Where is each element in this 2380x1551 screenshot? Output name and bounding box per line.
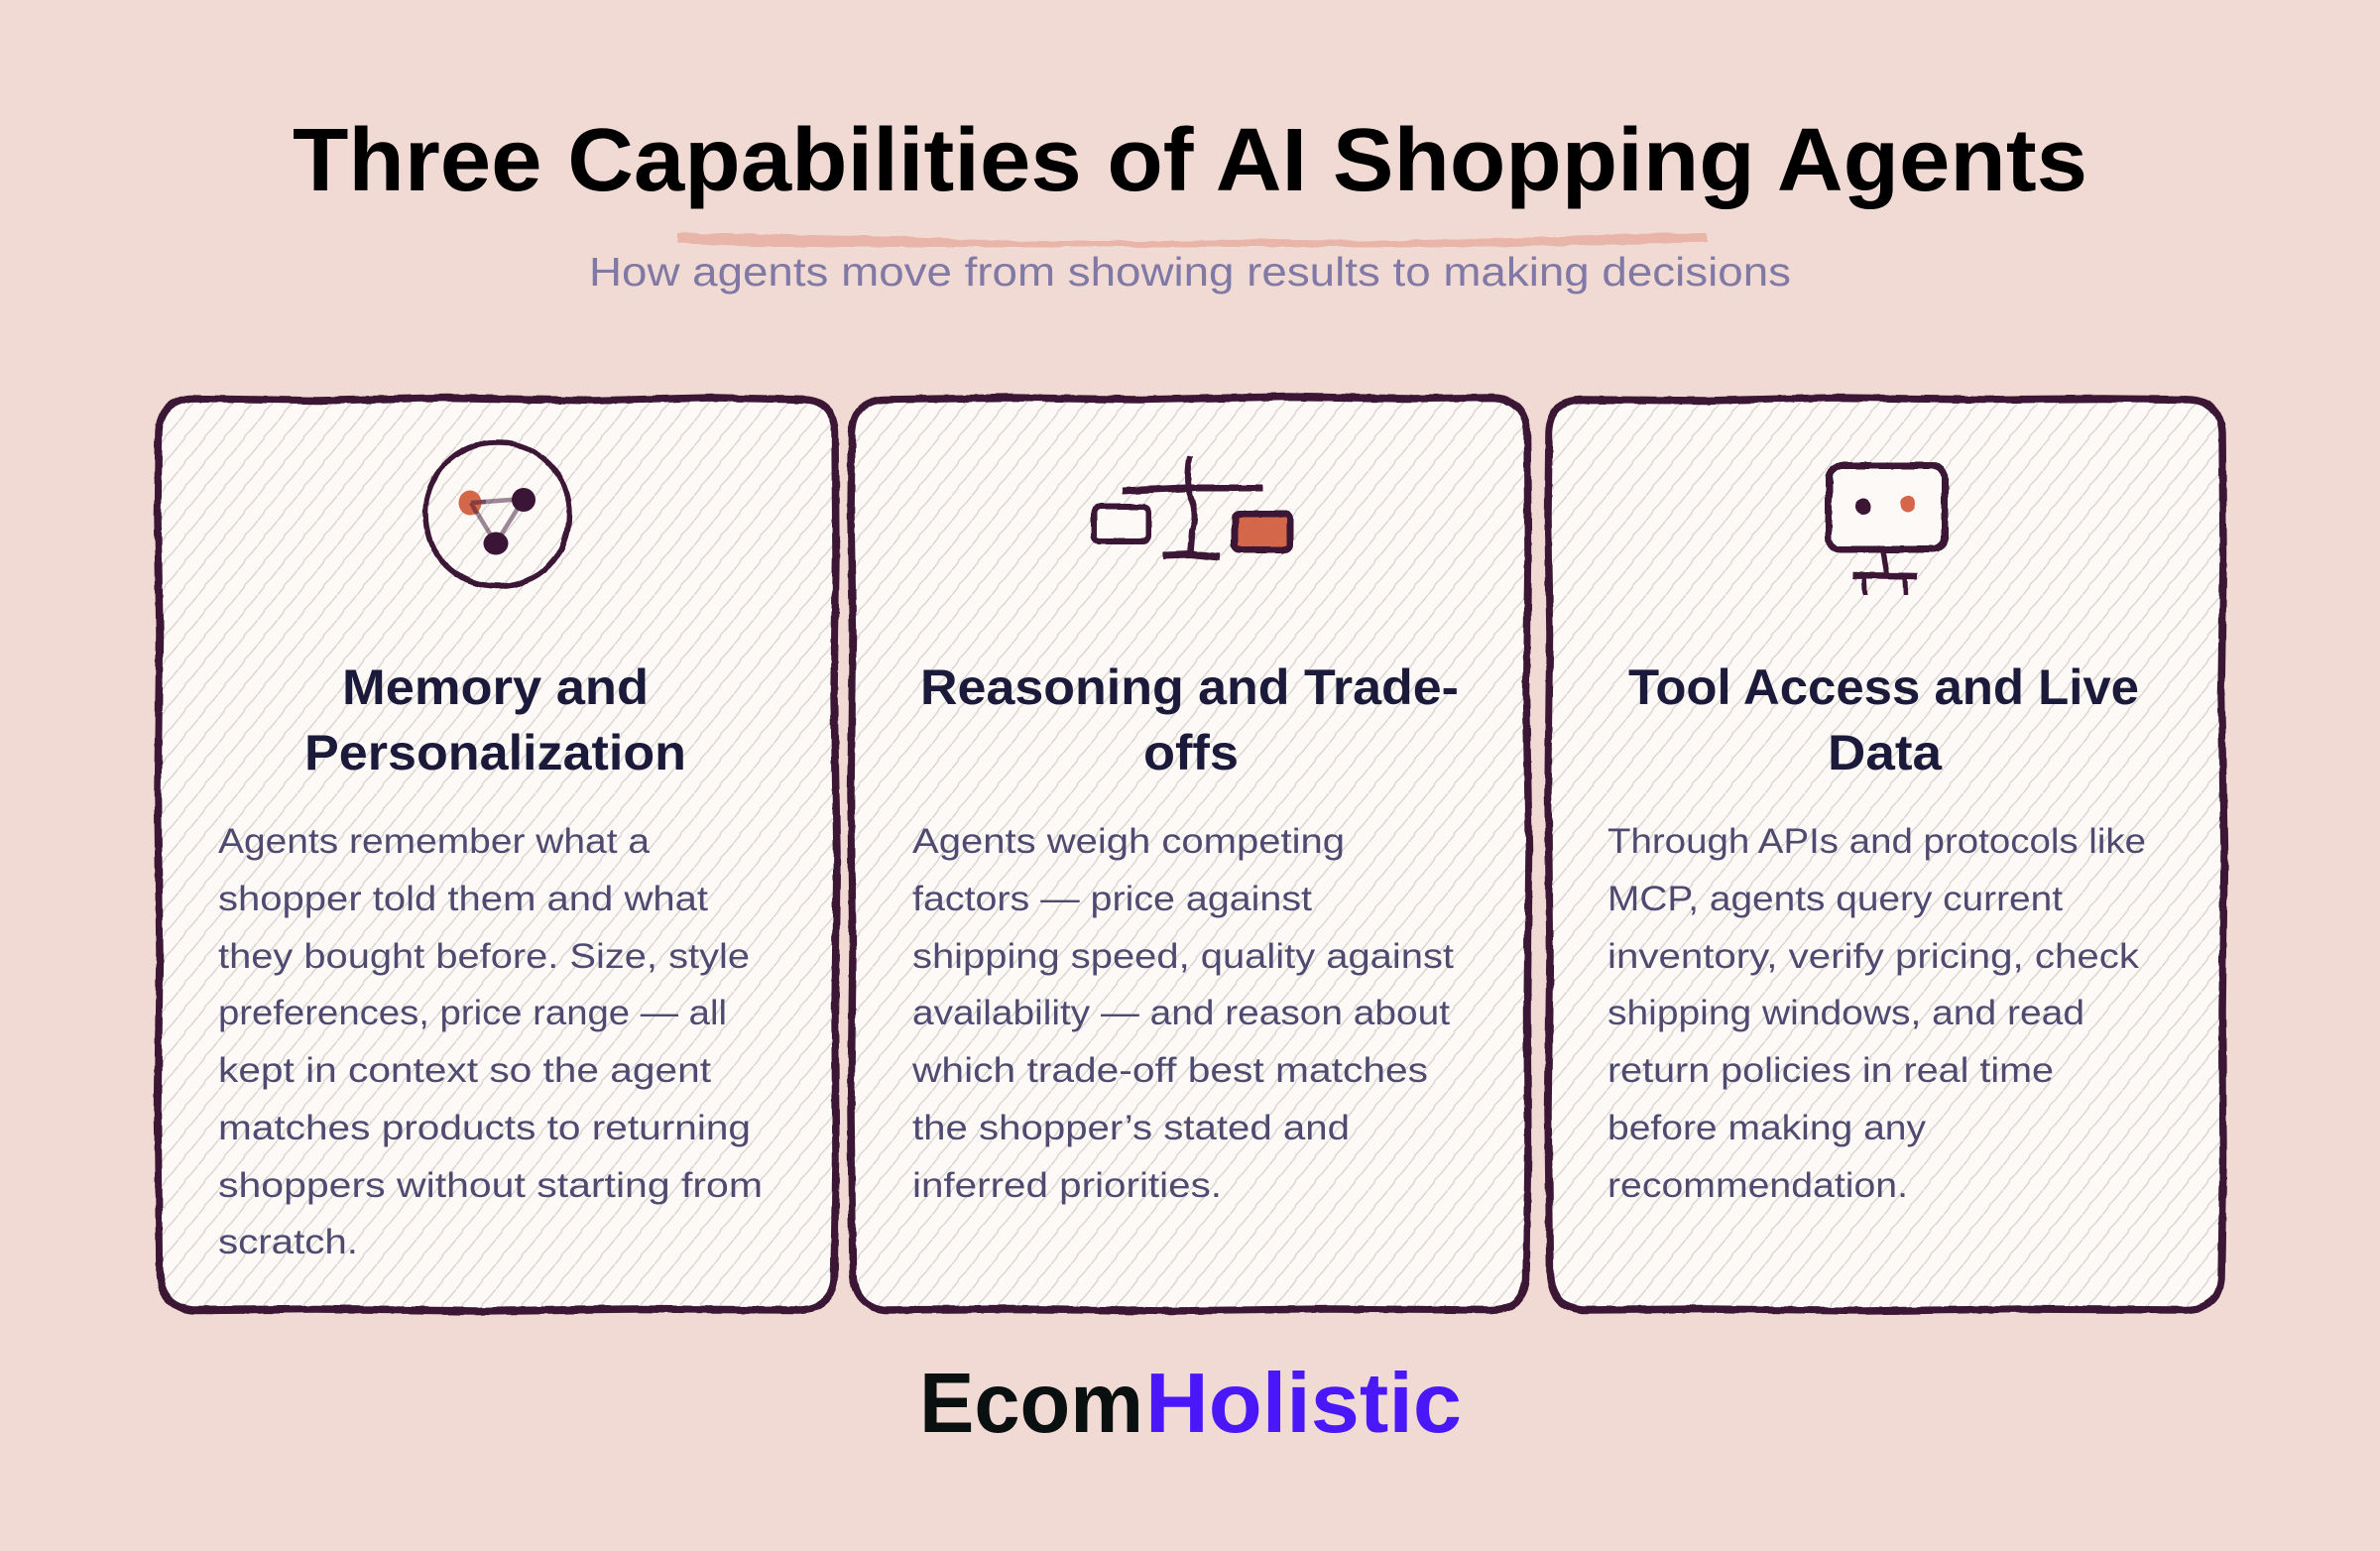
body text: tool access: MCP, agents query current: [1607, 880, 2063, 918]
body text: memory: they bought before. Size, style: [218, 937, 750, 976]
body text: reasoning: shipping speed, quality against: [912, 937, 1454, 976]
body text: reasoning: which trade-off best matches: [911, 1051, 1428, 1090]
body text: reasoning: inferred priorities.: [912, 1166, 1222, 1205]
heading: reasoning and trade-offs: offs: [1143, 725, 1239, 780]
body text: memory: shopper told them and what: [218, 880, 708, 918]
heading: tool access and live data: Tool Access and Live: [1628, 659, 2139, 715]
heading: reasoning and trade-offs: Reasoning and Trade-: [920, 659, 1459, 715]
body text: memory: shoppers without starting from: [218, 1166, 763, 1205]
logo: EcomHolistic: Holistic: [1145, 1357, 1462, 1451]
icon: memory network: [425, 442, 569, 586]
body text: memory: matches products to returning: [218, 1109, 751, 1147]
panel: reasoning and trade-offs: [851, 397, 1529, 1311]
body text: tool access: inventory, verify pricing, check: [1607, 937, 2140, 976]
body text: reasoning: factors — price against: [912, 880, 1312, 918]
body text: tool access: return policies in real time: [1607, 1051, 2054, 1090]
heading: tool access and live data: Data: [1828, 725, 1943, 780]
body text: reasoning: the shopper’s stated and: [912, 1109, 1350, 1147]
subtitle: How agents move from showing results to making decisions: [589, 249, 1791, 295]
panel: memory and personalization: [158, 398, 837, 1311]
title underline: [677, 233, 1708, 247]
heading: memory and personalization: Personalization: [304, 725, 686, 780]
body text: memory: Agents remember what a: [218, 822, 651, 861]
body text: reasoning: Agents weigh competing: [912, 822, 1345, 861]
body text: memory: scratch.: [218, 1223, 358, 1261]
body text: memory: preferences, price range — all: [218, 994, 727, 1032]
body text: reasoning: availability — and reason about: [912, 994, 1450, 1032]
body text: tool access: before making any: [1607, 1109, 1927, 1147]
logo: EcomHolistic: Ecom: [919, 1357, 1143, 1451]
icon: monitor: [1829, 466, 1945, 595]
body text: tool access: shipping windows, and read: [1607, 994, 2084, 1032]
body text: memory: kept in context so the agent: [218, 1051, 711, 1090]
title: Three Capabilities of AI Shopping Agents: [293, 111, 2087, 210]
body text: tool access: Through APIs and protocols like: [1607, 822, 2146, 861]
heading: memory and personalization: Memory and: [342, 659, 649, 715]
body text: tool access: recommendation.: [1607, 1166, 1908, 1205]
icon: balance scale: [1094, 456, 1290, 557]
logo: EcomHolistic: [919, 1357, 1462, 1451]
panel: tool access and live data: [1548, 398, 2224, 1311]
